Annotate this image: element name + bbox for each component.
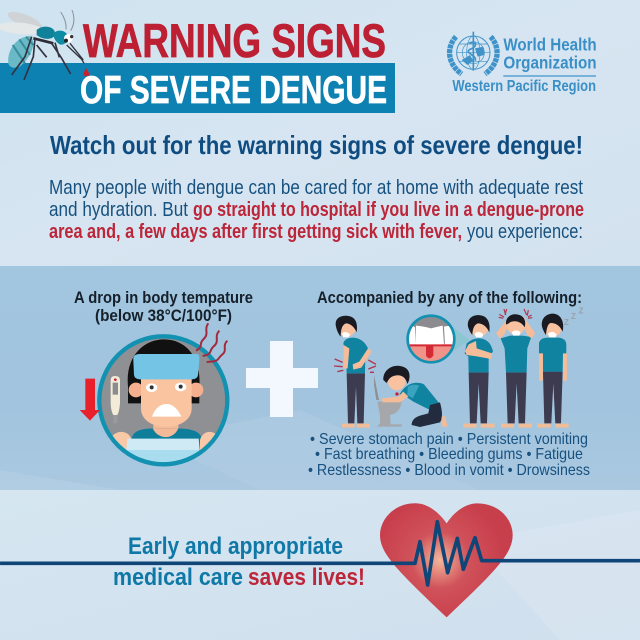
icon: mosquito <box>0 8 89 80</box>
closing message <box>113 533 365 591</box>
closing message: Early and appropriate <box>128 533 343 560</box>
heading: accompanied by: Accompanied by any of the following: <box>317 289 582 307</box>
figure: fast breathing <box>463 315 495 428</box>
intro paragraph: area and, a few days after first getting sick with fever, <box>49 220 462 243</box>
closing message: medical care <box>113 564 243 591</box>
icon: heat waves <box>196 323 227 362</box>
icon: zzz: Z <box>579 307 584 316</box>
intro paragraph: you experience: <box>467 220 583 243</box>
background: middle band <box>0 266 640 490</box>
icon: WHO emblem <box>450 32 497 74</box>
background: bottom section <box>0 490 640 640</box>
heading: a drop in body temperature: (below 38°C/100°F) <box>95 307 232 325</box>
subtitle: of severe dengue: OF SEVERE DENGUE <box>80 69 387 112</box>
icon: white plus <box>246 341 318 417</box>
illustration: symptom figures <box>334 307 584 428</box>
header blue band <box>0 63 395 113</box>
heading: a drop in body temperature <box>74 289 253 325</box>
figure: stomach pain <box>334 316 376 428</box>
symptom list: • Restlessness • Blood in vomit • Drowsiness <box>308 462 590 479</box>
icon: sick person with low temperature <box>80 323 227 467</box>
intro paragraph: and hydration. But <box>49 198 188 221</box>
figure: vomiting at toilet <box>374 366 448 427</box>
text: Organization: Organization <box>503 53 597 73</box>
icon: red down arrow <box>80 379 100 421</box>
symptom list: • Fast breathing • Bleeding gums • Fatigue <box>315 446 583 463</box>
icon: zzz <box>564 307 584 327</box>
icon: thermometer <box>111 376 120 423</box>
icon: heart with heartbeat line <box>0 503 640 617</box>
closing message: saves lives! <box>248 564 365 591</box>
background: top section <box>0 0 640 266</box>
icon: bleeding gums magnifier <box>407 316 470 363</box>
title: warning signs: WARNING SIGNS <box>83 14 386 67</box>
intro paragraph <box>49 176 584 243</box>
figure: restlessness <box>496 309 535 428</box>
icon: zzz: Z <box>564 318 569 327</box>
figure: drowsiness <box>537 307 584 428</box>
logo: World Health Organization Western Pacific Region <box>450 32 597 95</box>
symptom list <box>308 431 590 479</box>
symptom list: • Severe stomach pain • Persistent vomiting <box>310 431 588 448</box>
text: Western Pacific Region: Western Pacific Region <box>452 78 596 95</box>
heading: a drop in body temperature: A drop in body tempature <box>74 289 253 307</box>
text: World Health: World Health <box>503 35 597 55</box>
icon: zzz: Z <box>571 312 576 321</box>
